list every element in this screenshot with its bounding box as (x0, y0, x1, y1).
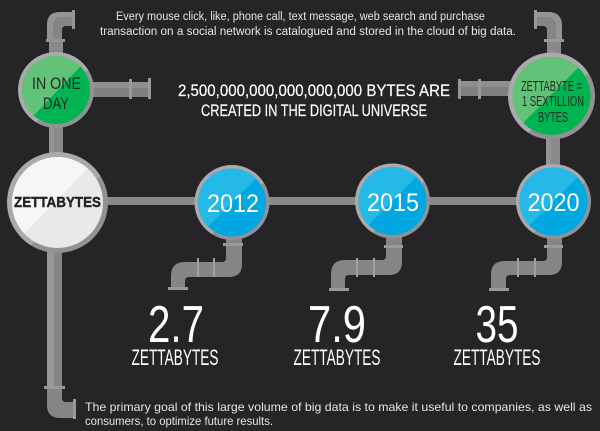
stat: 7.9 zettabytes: ZETTABYTES (294, 345, 380, 370)
circle: in one day (18, 52, 94, 128)
circle: 2012: 2012 (207, 190, 259, 218)
pipe: vertical down to lower elbow (44, 250, 76, 419)
circle: zettabytes: ZETTABYTES (14, 195, 101, 211)
pipe: top left elbow (46, 10, 75, 56)
circle: zettabyte equals 1 sextillion bytes: BYTES (538, 109, 568, 126)
stat: 2.7 zettabytes: 2.7 (148, 296, 204, 354)
circle: 2015: 2015 (367, 189, 419, 217)
circle: zettabyte equals 1 sextillion bytes (508, 52, 595, 140)
headline (178, 81, 450, 120)
pipe: vertical between in one day and zettabytes (49, 124, 63, 156)
pipe: top right elbow (534, 10, 564, 58)
stat: 2.7 zettabytes (132, 296, 218, 370)
stat: 35 zettabytes (454, 296, 540, 370)
circle: 2020 (516, 164, 591, 239)
circle: in one day: IN ONE (32, 75, 81, 93)
stat: 2.7 zettabytes: ZETTABYTES (132, 345, 218, 370)
stat: 7.9 zettabytes (294, 296, 380, 370)
pipe: below 2015 (329, 237, 403, 291)
horizontal connecting pipe (105, 197, 555, 205)
pipe: below 2020 (489, 237, 563, 291)
pipe: branch from zettabyte circle (458, 79, 512, 99)
circle: zettabytes (7, 152, 108, 253)
pipe: below 2012 (168, 238, 243, 290)
circle: in one day: DAY (43, 95, 69, 113)
intro text: Every mouse click, like, phone call, text message, web search and purchase (116, 11, 485, 23)
intro text (100, 11, 516, 38)
circle: 2020: 2020 (528, 189, 580, 217)
headline: 2,500,000,000,000,000,000 BYTES ARE (178, 81, 450, 100)
circle: 2012 (194, 165, 270, 240)
headline: CREATED IN THE DIGITAL UNIVERSE (201, 101, 427, 120)
closing text: The primary goal of this large volume of big data is to make it useful to companies, as well as (85, 400, 592, 414)
pipe: branch from in one day circle (90, 78, 151, 99)
closing text: consumers, to optimize future results. (85, 414, 273, 428)
pipe: vertical between zettabyte and 2020 (546, 135, 560, 168)
circle: 2015 (355, 164, 430, 238)
stat: 7.9 zettabytes: 7.9 (308, 296, 366, 354)
intro text: transaction on a social network is catalogued and stored in the cloud of big data. (100, 26, 516, 38)
stat: 35 zettabytes: ZETTABYTES (454, 345, 540, 370)
closing text (85, 400, 592, 428)
stat: 35 zettabytes: 35 (476, 296, 518, 354)
